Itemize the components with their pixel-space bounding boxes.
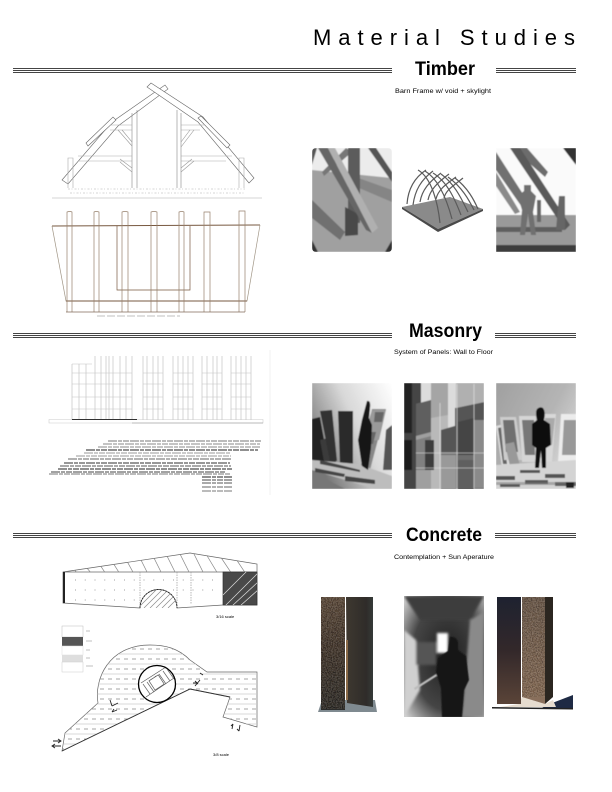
icon: flow arrows <box>52 673 240 748</box>
drawing: section label: 3/16 scale <box>216 614 235 619</box>
photo: concrete monolith, left <box>318 597 377 712</box>
caption: concrete: Contemplation + Sun Aperature <box>394 554 494 561</box>
heading: timber: Timber <box>415 59 476 80</box>
drawing: wall panel elevation <box>49 350 270 495</box>
drawing: plan label: 3/8 scale <box>213 752 230 757</box>
title: Material Studies <box>313 25 575 50</box>
panel: concrete <box>13 524 576 757</box>
photo: interior with figure <box>404 596 484 717</box>
drawing: circular void <box>138 666 176 702</box>
photo: concrete monolith, right <box>492 597 573 710</box>
drawing: concrete section <box>63 550 258 608</box>
drawing: barn frame plan <box>52 211 260 316</box>
drawing: barn frame section <box>52 83 262 198</box>
drawing: floor panel plan <box>49 441 261 491</box>
photo: timber model overview <box>402 170 483 232</box>
caption: timber: Barn Frame w/ void + skylight <box>395 88 491 95</box>
heading: masonry: Masonry <box>409 320 482 342</box>
photo: masonry panels with silhouette, left <box>312 383 392 489</box>
photo: timber joint close-up <box>312 148 392 252</box>
caption: masonry: System of Panels: Wall to Floor <box>394 349 494 356</box>
photo: timber model with figure <box>496 148 576 252</box>
panel: timber <box>13 59 576 316</box>
panel: masonry <box>13 320 576 495</box>
drawing: concrete floor plan <box>52 645 260 751</box>
heading: concrete: Concrete <box>406 524 482 546</box>
photo: stacked masonry blocks <box>404 383 484 490</box>
drawing: material legend <box>62 626 93 672</box>
photo: masonry panels with silhouette, right <box>496 383 576 489</box>
